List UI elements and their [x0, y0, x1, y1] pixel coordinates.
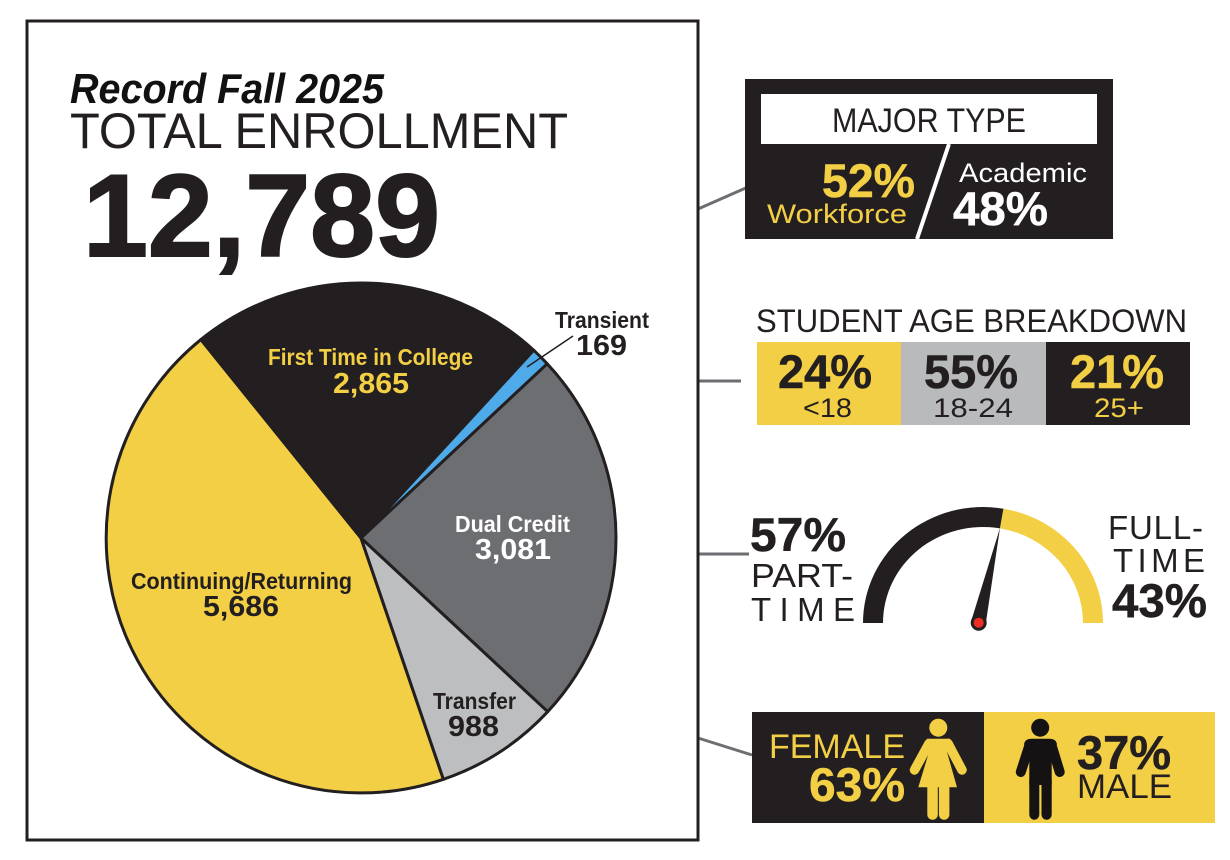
connector lines	[698, 187, 752, 755]
heading: student age breakdown: STUDENT AGE BREAKDOWN	[756, 303, 1187, 339]
slice: continuing/returning	[106, 340, 443, 793]
segment: under 18	[757, 342, 901, 425]
panel side: male: MALE	[1077, 768, 1172, 806]
label: continuing/returning	[131, 568, 352, 623]
slice: transient	[361, 350, 547, 538]
label: dual credit	[455, 511, 570, 566]
stat: full-time	[1108, 509, 1207, 627]
label: first time in college	[268, 344, 473, 400]
segment: 18-24	[901, 342, 1046, 425]
icon: female figure	[914, 719, 962, 820]
slice: first time in college	[201, 283, 534, 538]
panel: total enrollment	[27, 21, 698, 840]
pie chart	[106, 283, 616, 793]
gauge arc: full-time	[1000, 509, 1103, 623]
label: continuing/returning: Continuing/Returning	[131, 568, 352, 594]
label: dual credit: Dual Credit	[455, 511, 570, 537]
stat: workforce: Workforce	[767, 199, 907, 229]
stat: part-time: PART-	[751, 557, 853, 594]
stat: academic: 48%	[953, 182, 1048, 235]
segment: 25 plus: 21%	[1070, 345, 1164, 398]
label: continuing/returning: 5,686	[203, 591, 279, 623]
panel side: male: 37%	[1077, 726, 1171, 779]
label: first time in college: First Time in College	[268, 344, 473, 370]
stat: part-time: 57%	[750, 508, 846, 561]
label: first time in college: 2,865	[333, 368, 409, 400]
slice: transfer	[361, 538, 548, 779]
label: transfer: Transfer	[433, 688, 516, 714]
gauge arc: part-time	[863, 507, 1004, 623]
panel: enrollment status gauge	[750, 507, 1207, 631]
stat: full-time: FULL-	[1108, 509, 1203, 546]
segment: 18-24: 18-24	[933, 393, 1013, 423]
stat: academic	[953, 158, 1087, 235]
stat: part-time	[750, 508, 855, 628]
label: transfer: 988	[448, 711, 499, 743]
gauge needle	[971, 528, 1000, 631]
title: record fall 2025: Record Fall 2025	[70, 65, 385, 112]
segment: 25 plus: 25+	[1094, 393, 1144, 423]
stat: workforce: 52%	[822, 154, 915, 207]
heading: major type: MAJOR TYPE	[832, 102, 1026, 140]
panel side: female: 63%	[809, 758, 905, 811]
label: dual credit: 3,081	[475, 534, 551, 566]
label: transient with leader	[527, 307, 649, 367]
panel: major type	[745, 79, 1113, 239]
panel: gender	[752, 712, 1215, 823]
panel side: male	[984, 712, 1215, 823]
stat: workforce	[767, 154, 915, 229]
label: transient with leader: Transient	[555, 307, 649, 333]
segment: 18-24: 55%	[924, 345, 1018, 398]
panel side: female	[752, 712, 984, 823]
segment: under 18: <18	[803, 393, 852, 423]
label: transfer	[433, 688, 516, 743]
stat: full-time: TIME	[1113, 542, 1205, 579]
heading: total enrollment: TOTAL ENROLLMENT	[70, 103, 568, 159]
segment: under 18: 24%	[778, 345, 872, 398]
total number: 12,789	[83, 150, 440, 281]
slice: dual credit	[361, 364, 616, 712]
stat: part-time: TIME	[751, 591, 855, 628]
icon: male figure	[1021, 719, 1060, 820]
stat: academic: Academic	[959, 158, 1087, 188]
stat: full-time: 43%	[1112, 574, 1207, 627]
label: transient with leader: 169	[576, 330, 627, 362]
panel side: female: FEMALE	[769, 728, 905, 766]
panel: student age breakdown	[756, 303, 1190, 425]
segment: 25 plus	[1046, 342, 1190, 425]
